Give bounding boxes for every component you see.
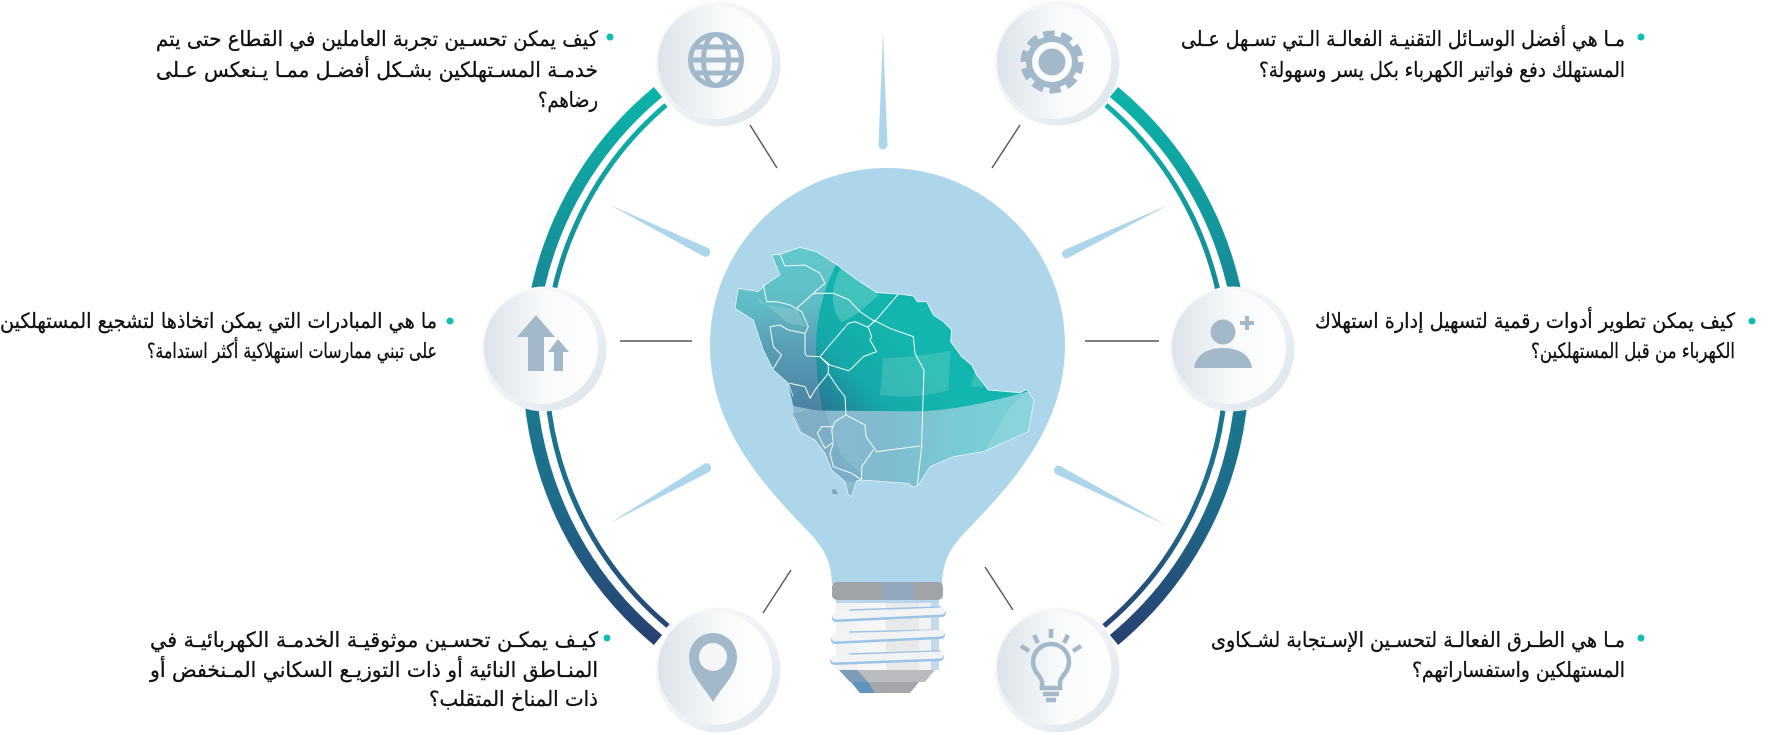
text block: bottom right: [1211, 628, 1644, 683]
icon badge: gear: [994, 0, 1120, 126]
bulb glass: [710, 168, 1065, 584]
light bulb with map: [710, 168, 1065, 584]
icon: location pin: [689, 633, 737, 702]
text block: middle left: على تبني ممارسات استهلاكية أكثر استدامة؟: [147, 337, 437, 363]
text block: bottom right: مـا هي الطـرق الفعالـة لتحسـين الإسـتجابة لشـكاوى: [1211, 628, 1625, 652]
bullet: [606, 34, 614, 40]
text block: top left: [156, 27, 614, 113]
icon: small lightbulb: [1021, 629, 1081, 700]
icon: up arrows: [517, 315, 569, 371]
icon badge: arrows: [482, 286, 606, 412]
bullet: [1638, 34, 1644, 40]
text block: middle right: كيف يمكن تطوير أدوات رقمية لتسهيل إدارة استهلاك: [1315, 307, 1735, 334]
text block: top left: خدمـة المسـتهلكين بشـكل أفضـل ممـا يـنعكس عـلى: [156, 56, 598, 82]
icon: person with plus: [1194, 316, 1254, 368]
text block: bottom left: [149, 628, 610, 711]
bulb screw base: [832, 582, 943, 693]
icon: globe: [690, 34, 742, 86]
text block: bottom left: ذات المناخ المتقلب؟: [429, 687, 598, 711]
text block: middle right: [1315, 307, 1756, 363]
icon badge: location pin: [656, 608, 780, 732]
icon badge: lightbulb: [994, 608, 1120, 732]
text block: top left: رضاهم؟: [538, 88, 598, 113]
connector lines: [620, 125, 1159, 613]
ring arcs: right: [1104, 92, 1243, 640]
text block: middle left: ما هي المبادرات التي يمكن اتخاذها لتشجيع المستهلكين: [0, 309, 437, 333]
rays around the bulb: [610, 32, 1168, 525]
icon: gear: [1024, 34, 1080, 90]
icon badge: globe: [656, 2, 780, 126]
text block: bottom left: كيـف يمكـن تحسـين موثوقيـة الخدمـة الكهربائيـة في: [150, 628, 598, 652]
text block: middle left: [0, 309, 454, 363]
ring arcs: left: [529, 92, 668, 640]
text block: bottom right: المستهلكين واستفساراتهم؟: [1412, 658, 1625, 683]
text block: top right: مـا هي أفضل الوسـائل التقنيـة الفعالـة الـتي تسـهل عـلى: [1181, 25, 1625, 51]
text block: bottom left: المنـاطق النائية أو ذات التوزيـع السكاني المـنخفض أو: [149, 656, 598, 682]
icon badge: person: [1170, 286, 1294, 412]
bullet: [1748, 318, 1756, 324]
text block: top right: المستهلك دفع فواتير الكهرباء بكل يسر وسهولة؟: [1259, 58, 1625, 82]
bullet: [604, 634, 610, 642]
text block: top left: كيف يمكن تحسـين تجربة العاملين في القطاع حتى يتم: [156, 27, 598, 52]
bullet: [1638, 634, 1644, 642]
bullet: [446, 318, 454, 324]
text block: top right: [1181, 25, 1644, 82]
map of Saudi Arabia: [734, 247, 1034, 497]
